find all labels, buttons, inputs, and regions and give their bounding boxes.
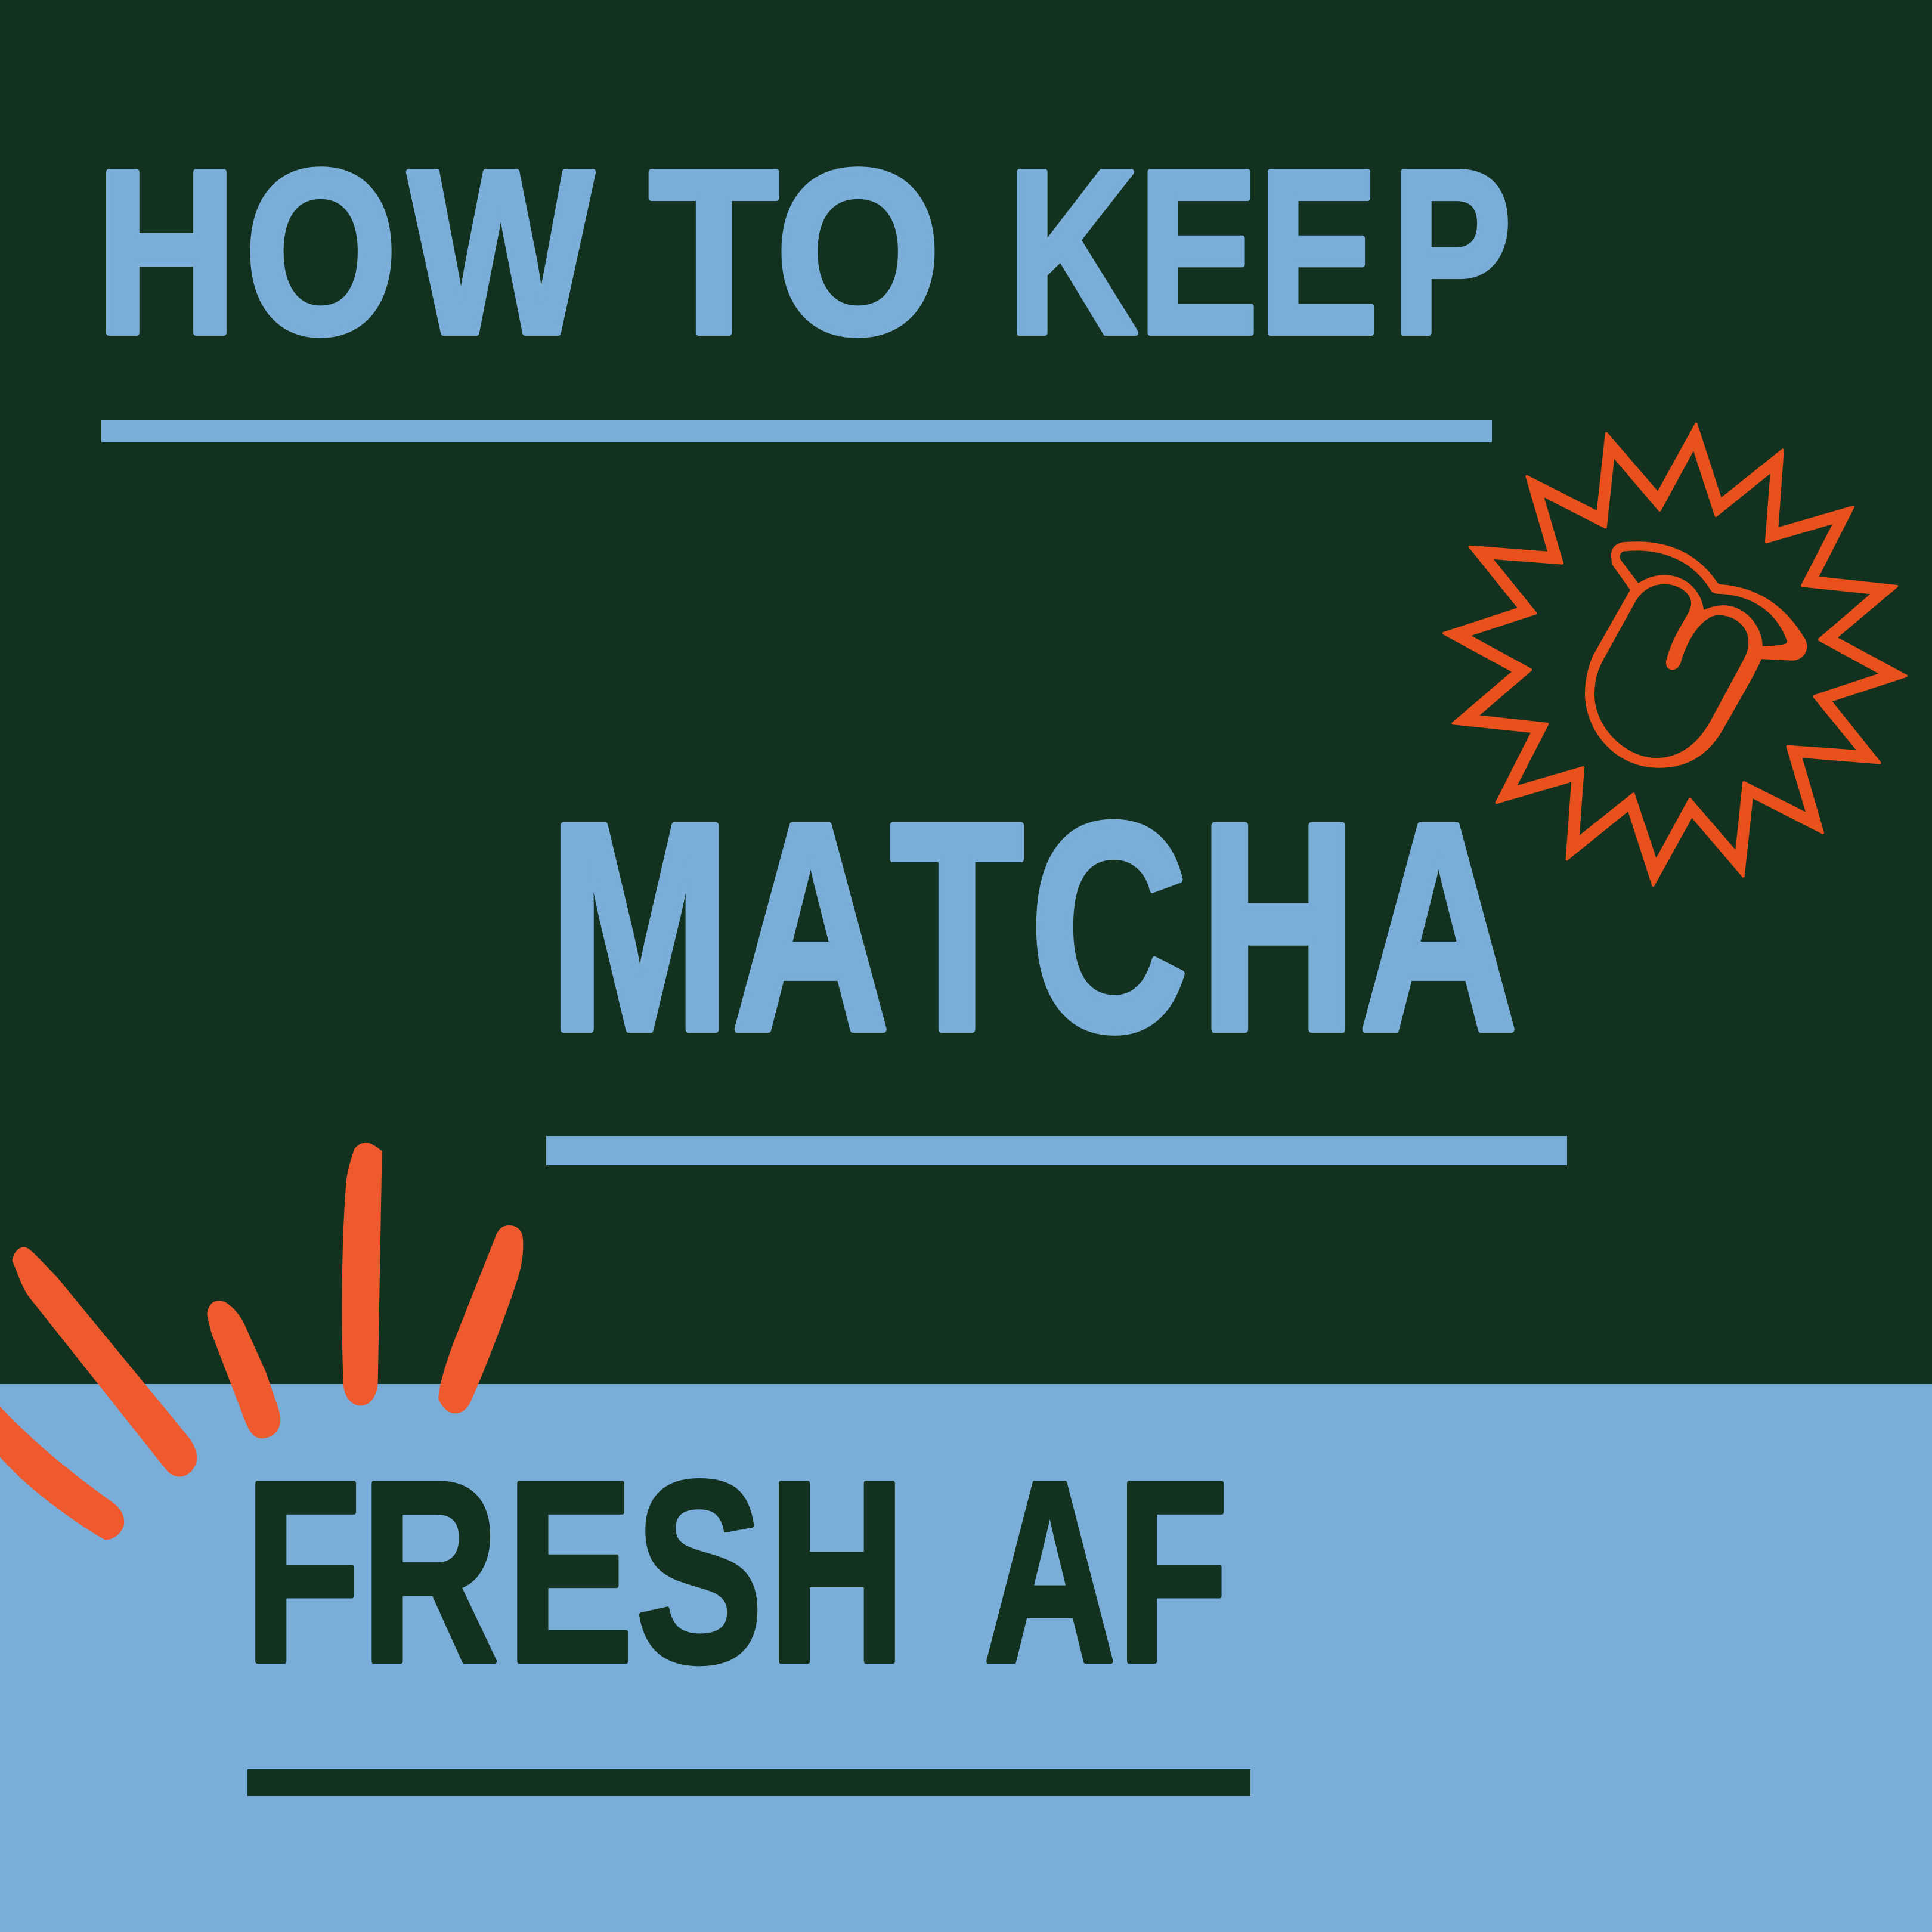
heading: how to keep xyxy=(95,121,1512,383)
heading: fresh af: AF xyxy=(983,1427,1228,1716)
ray 4 xyxy=(342,1143,382,1405)
ray 1 xyxy=(0,1405,124,1540)
heading: fresh af xyxy=(244,1427,1228,1716)
divider bar under matcha xyxy=(546,1136,1567,1165)
tongue and lips xyxy=(1586,542,1807,767)
heading: fresh af: FRESH xyxy=(244,1427,906,1716)
ray 2 xyxy=(13,1247,197,1477)
heading: matcha: MATCHA xyxy=(549,762,1518,1092)
icon: starburst with tongue xyxy=(1443,423,1907,886)
heading: how to keep: HOW xyxy=(95,121,595,382)
divider bar under how to keep xyxy=(101,420,1492,442)
heading: how to keep: TO xyxy=(649,122,941,383)
starburst outline xyxy=(1443,423,1907,886)
panel: dark green top background xyxy=(0,0,1932,1384)
ray 3 xyxy=(207,1301,280,1438)
ray 5 xyxy=(438,1225,523,1413)
panel: light blue bottom background xyxy=(0,1384,1932,1932)
divider bar under fresh af xyxy=(247,1769,1250,1796)
icon: orange burst rays xyxy=(0,1143,523,1540)
heading: how to keep: KEEP xyxy=(1007,122,1512,383)
